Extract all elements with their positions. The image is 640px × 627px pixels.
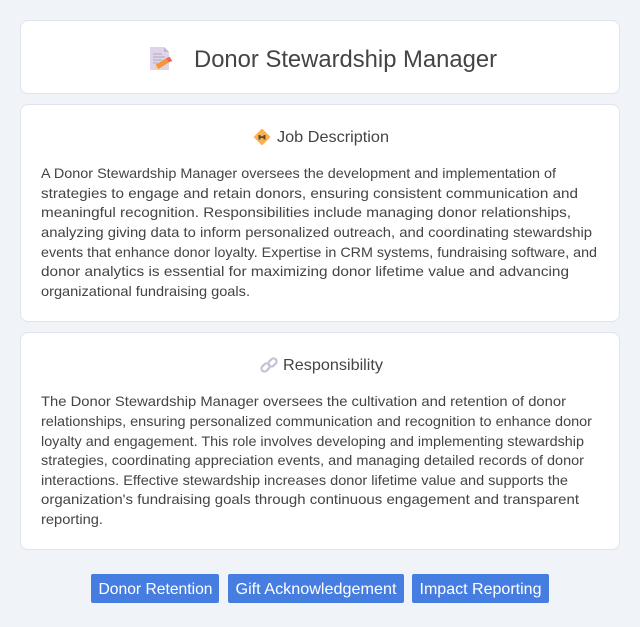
text block: job description body: meaningful recognition. Responsibilities include managing donor relationships,	[41, 204, 571, 220]
panel: responsibility	[20, 332, 620, 550]
text block: responsibility body: loyalty and engagement. This role involves developing and implementing stewardship	[41, 433, 584, 449]
tag: Gift Acknowledgement: Gift Acknowledgement	[236, 581, 397, 598]
panel: responsibility: Responsibility	[283, 357, 383, 374]
tag: Donor Retention	[91, 574, 219, 603]
tags row	[91, 574, 549, 603]
text block: responsibility body: interactions. Effective stewardship increases donor lifetime value and supports the	[41, 472, 568, 488]
tag: Gift Acknowledgement	[228, 574, 404, 603]
text block: job description body	[41, 165, 597, 299]
text block: job description body: analyzing giving data to inform personalized outreach, and coordinating stewardship	[41, 224, 592, 240]
text block: job description body: donor analytics is essential for maximizing donor lifetime value and advancing	[41, 263, 569, 279]
tag: Impact Reporting	[412, 574, 549, 603]
icon: orange diamond	[254, 128, 270, 146]
panel: job description	[20, 104, 620, 322]
text block: responsibility body: relationships, ensuring personalized communication and recognition to enhance donor	[41, 413, 592, 429]
text block: responsibility body: The Donor Stewardship Manager oversees the cultivation and retention of donor	[41, 393, 566, 409]
text block: responsibility body: strategies, coordinating appreciation events, and managing detailed records of donor	[41, 452, 584, 468]
text block: job description body: events that enhance donor loyalty. Expertise in CRM systems, fundraising software, and	[41, 244, 597, 260]
text block: responsibility body: reporting.	[41, 511, 103, 527]
heading: job title: Donor Stewardship Manager	[194, 46, 497, 73]
icon: chain link	[260, 357, 278, 373]
tag: Impact Reporting: Impact Reporting	[420, 581, 542, 598]
text block: responsibility body: organization's fundraising goals through continuous engagement and transparent	[41, 491, 579, 507]
text block: job description body: organizational fundraising goals.	[41, 283, 250, 299]
text block: job description body: strategies to engage and retain donors, ensuring consistent communication and	[41, 185, 578, 201]
heading: Job Description: Job Description	[277, 129, 389, 146]
tag: Donor Retention: Donor Retention	[98, 581, 212, 598]
icon: memo with pencil	[150, 47, 172, 70]
text block: job description body: A Donor Stewardship Manager oversees the development and implementation of	[41, 165, 556, 181]
panel: title	[20, 20, 620, 94]
